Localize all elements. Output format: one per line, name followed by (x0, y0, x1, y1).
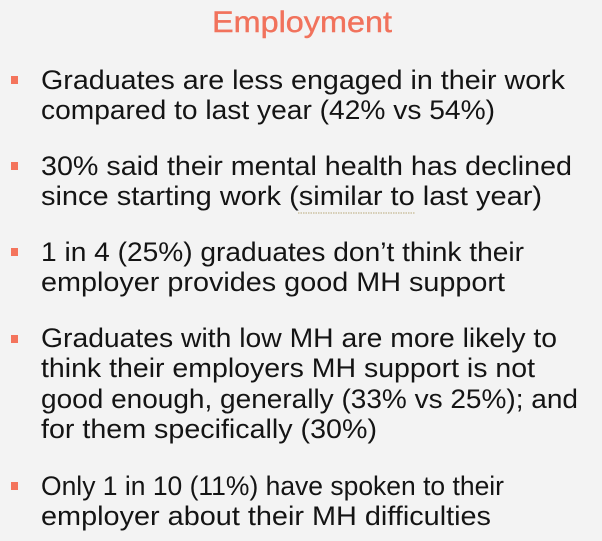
bullet item: engagement: compared to last year (42% vs 54%) (41, 95, 495, 125)
bullet item: speaking to employer: employer about their MH difficulties (41, 501, 491, 531)
bullet item: low mental health graduates: good enough, generally (33% vs 25%); and (41, 384, 578, 414)
bullet item: engagement: Graduates are less engaged in their work (41, 65, 566, 95)
bullet item: speaking to employer: Only 1 in 10 (11%) have spoken to their (41, 471, 504, 501)
bullet item: mental health decline (11, 151, 572, 213)
bullet item: employer support: 1 in 4 (25%) graduates don’t think their (41, 237, 524, 267)
bullet item: employer support (11, 237, 524, 297)
bullet item: mental health decline: since starting work (similar to last year) (41, 181, 542, 211)
bullet item: low mental health graduates: for them specifically (30%) (41, 414, 377, 444)
title: Employment (212, 6, 393, 39)
bullet item: speaking to employer (11, 471, 504, 531)
bullet item: engagement (11, 65, 566, 125)
bullet item: low mental health graduates: Graduates with low MH are more likely to (41, 323, 557, 353)
bullet item: employer support: employer provides good MH support (41, 267, 506, 297)
bullet item: low mental health graduates: think their employers MH support is not (41, 353, 536, 383)
bullet item: mental health decline: 30% said their mental health has declined (41, 151, 572, 181)
bullet item: low mental health graduates (11, 323, 578, 444)
